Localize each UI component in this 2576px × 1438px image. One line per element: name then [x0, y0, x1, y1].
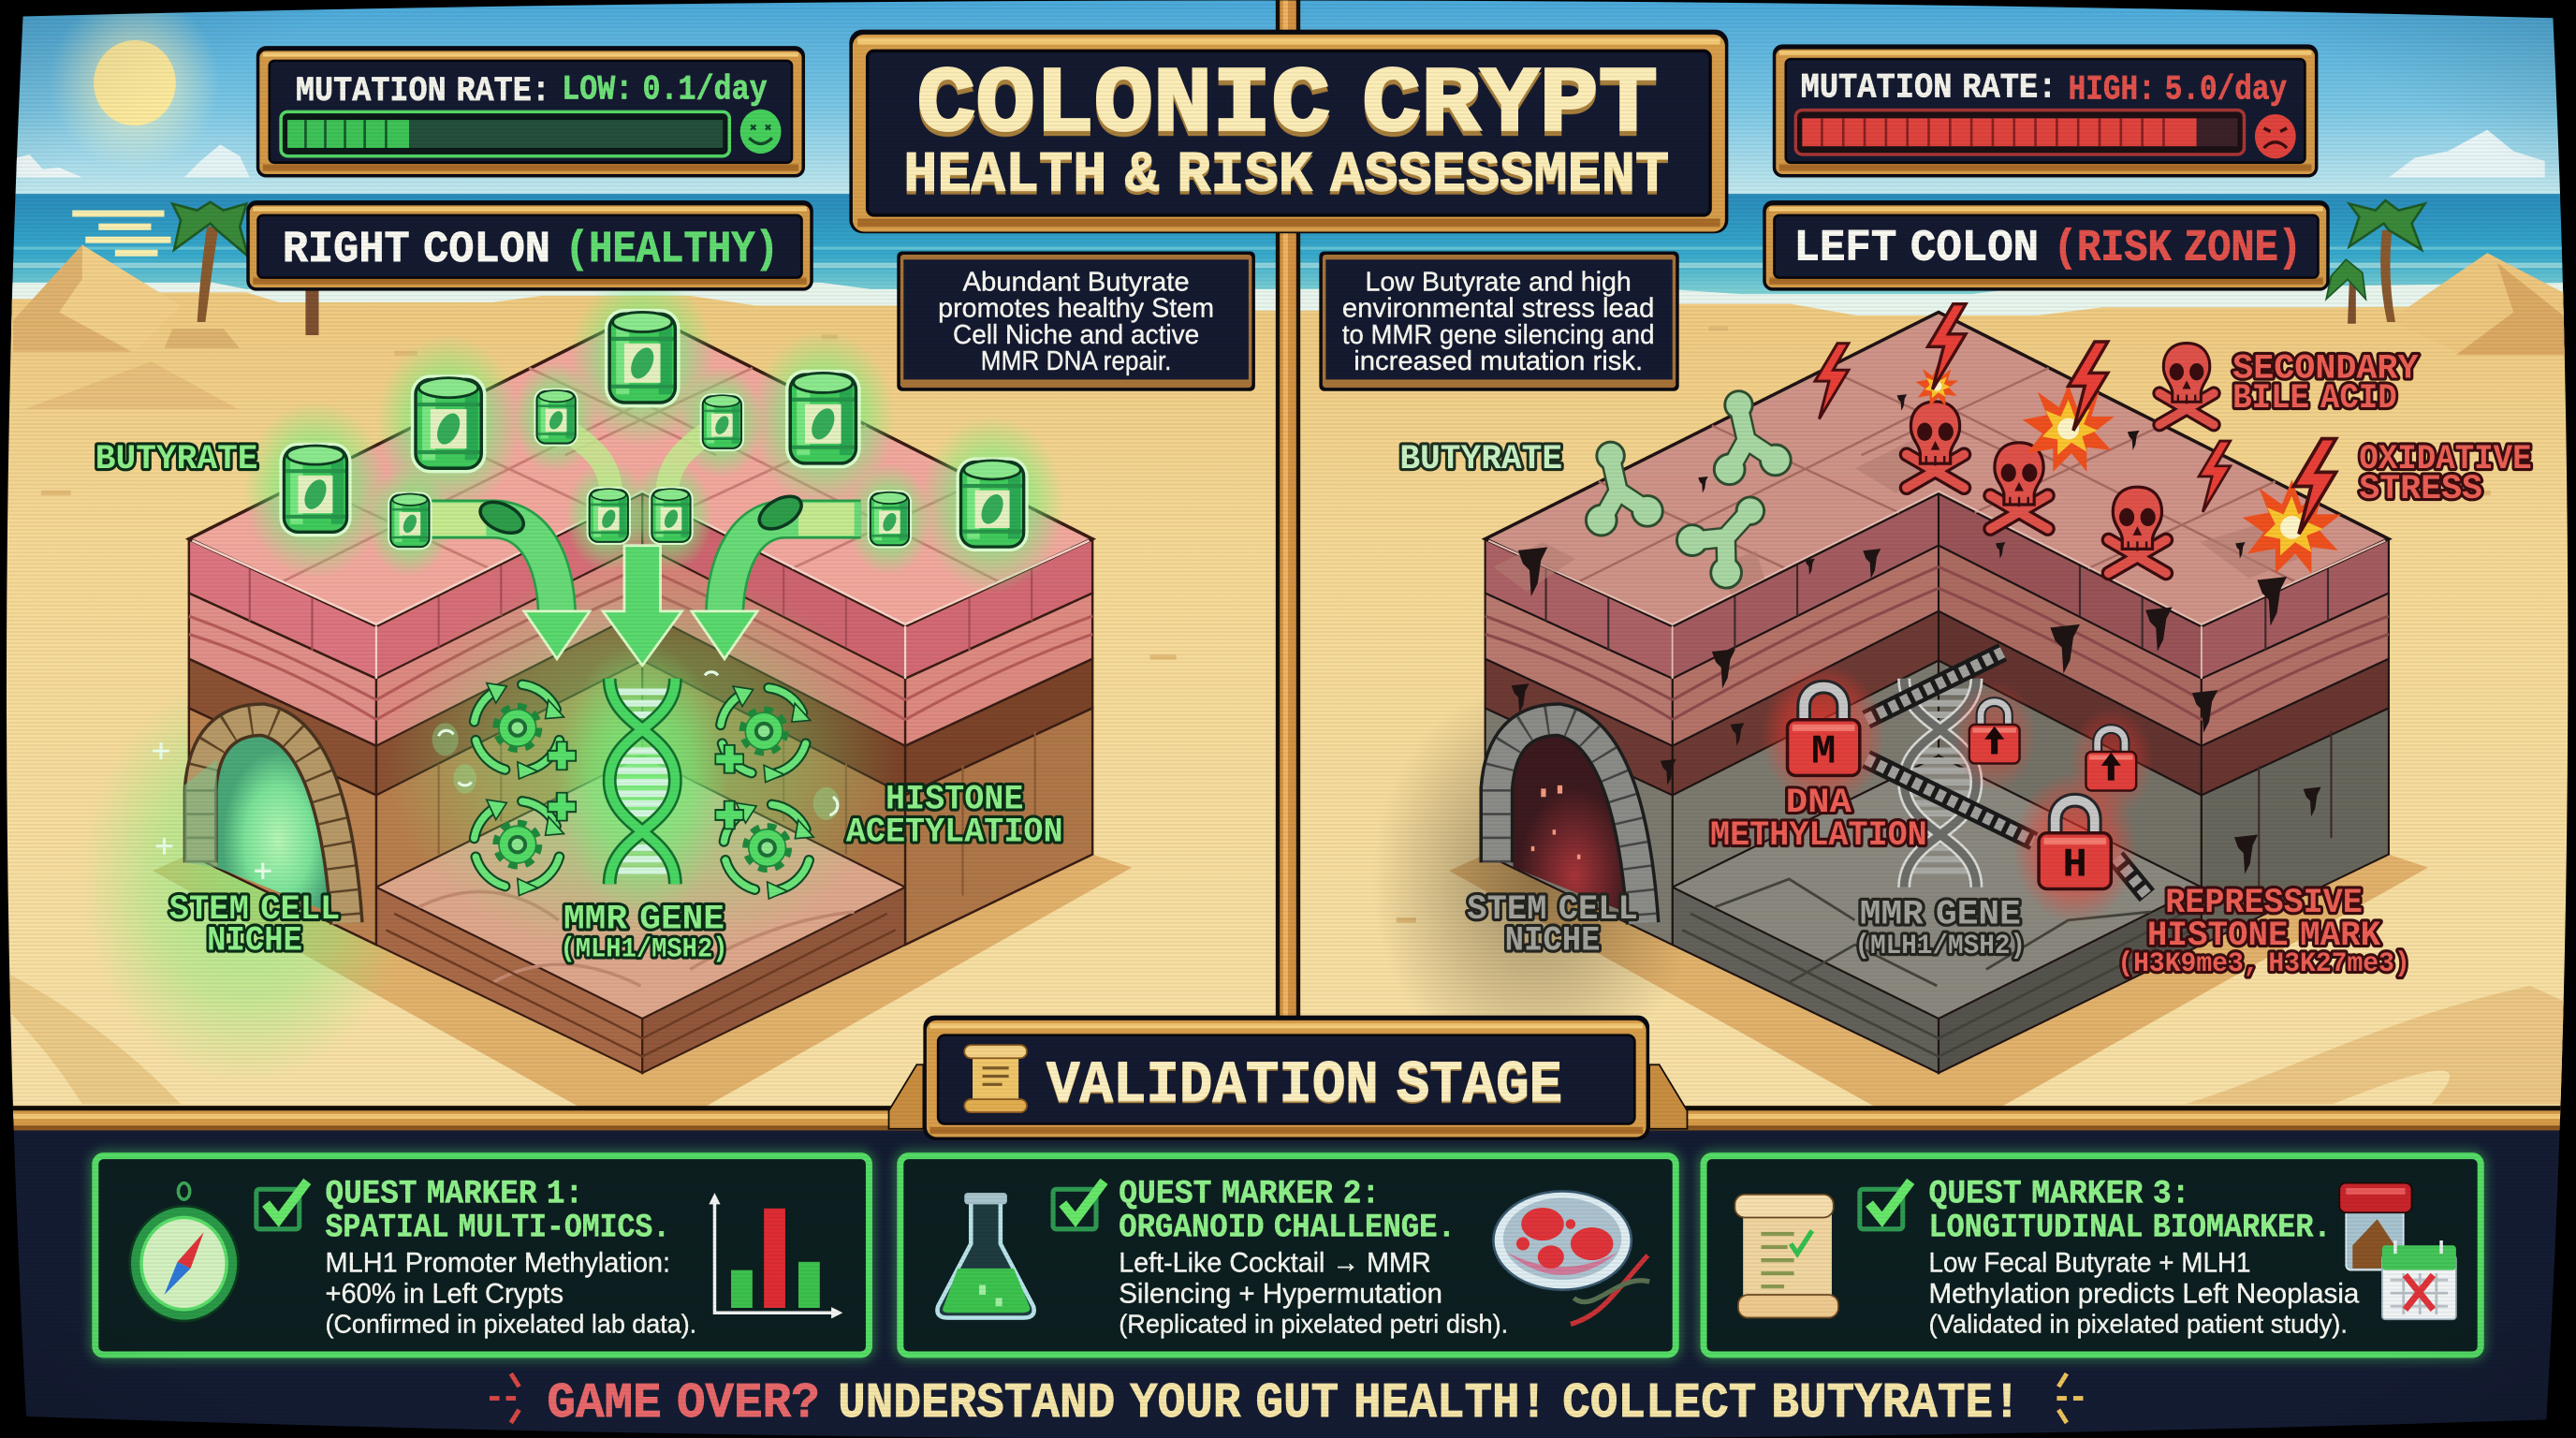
panel: quest marker 2 [900, 1156, 1676, 1355]
quest 1 text: +60% in Left Crypts [326, 1279, 564, 1310]
background: beach scene [0, 0, 2576, 1117]
panel: validation stage: VALIDATION STAGE [1046, 1051, 1562, 1119]
quest 1 text: MLH1 Promoter Methylation: [326, 1247, 670, 1278]
quest 3 text: Methylation predicts Left Neoplasia [1928, 1279, 2360, 1310]
icon: compass [130, 1183, 238, 1321]
labels: left colon: BILE ACID [2232, 379, 2397, 418]
icon: right palm trees [2326, 200, 2425, 324]
labels: right colon [95, 440, 1063, 964]
cracks [1512, 394, 2321, 874]
text box: risk summary: environmental stress lead [1342, 294, 1654, 324]
panel: quest marker 3 [1704, 1156, 2481, 1355]
labels: right colon: MMR GENE [564, 901, 724, 940]
quest 1 text: QUEST MARKER 1: [326, 1176, 583, 1213]
icon: butyrate barrels [279, 309, 1029, 551]
icon: parchment scroll [1734, 1195, 1838, 1318]
labels: left colon: REPRESSIVE [2165, 884, 2363, 923]
labels: left colon: BUTYRATE [1399, 440, 1562, 479]
icon: silenced MMR gene DNA [1904, 679, 1976, 888]
title text: HEALTH & RISK ASSESSMENT [903, 144, 1669, 209]
title plaque [849, 30, 1728, 233]
quest 2 text: ORGANOID CHALLENGE. [1119, 1210, 1456, 1247]
panel: mutation rate low: MUTATION RATE: [296, 72, 550, 111]
labels: right colon: NICHE [207, 921, 302, 961]
quest 3 text: QUEST MARKER 3: [1928, 1176, 2190, 1213]
quest 1 text [326, 1176, 696, 1338]
labels: right colon: BUTYRATE [95, 440, 258, 479]
panel: mutation rate high: MUTATION RATE: [1801, 69, 2056, 109]
quest 2 text: Silencing + Hypermutation [1119, 1279, 1442, 1310]
footer call to action: UNDERSTAND YOUR GUT HEALTH! COLLECT BUTYRATE! [838, 1375, 2021, 1431]
text box: risk summary: increased mutation risk. [1354, 346, 1643, 376]
labels: left colon: (MLH1/MSH2) [1855, 930, 2026, 961]
labels: left colon: (H3K9me3, H3K27me3) [2117, 947, 2410, 979]
panel: validation stage [923, 1016, 1649, 1140]
progress bar low [281, 111, 729, 156]
panel: quest marker 1 [95, 1156, 869, 1355]
arrows: butyrate flow [431, 431, 861, 666]
labels: left colon: METHYLATION [1710, 816, 1927, 856]
icon: sad face [2255, 114, 2296, 158]
quest 3 text [1928, 1176, 2360, 1338]
icon: check 2 [1053, 1181, 1104, 1229]
panel: right colon healthy block [82, 312, 1132, 1142]
icon: methylation and histone locks [1788, 687, 2136, 888]
sparkle right [2056, 1373, 2083, 1423]
text box: healthy summary [897, 252, 1255, 391]
pink top surface [189, 312, 1092, 626]
quest 2 text: QUEST MARKER 2: [1119, 1176, 1380, 1213]
heading: left colon: LEFT COLON [1794, 224, 2039, 273]
icon: flask [937, 1193, 1034, 1318]
icon: smiley [740, 110, 782, 154]
icon: petri dish [1493, 1191, 1649, 1325]
icon: methylation and histone locks: H [2063, 842, 2087, 888]
quest 3 text: Low Fecal Butyrate + MLH1 [1928, 1247, 2250, 1278]
quest 1 text: (Confirmed in pixelated lab data). [326, 1309, 696, 1338]
text box: risk summary [1319, 252, 1679, 391]
icon: scroll [964, 1045, 1027, 1112]
heading: left colon: (RISK ZONE) [2054, 224, 2302, 273]
labels: right colon: HISTONE [886, 780, 1023, 819]
quest 2 text: Left-Like Cocktail → MMR [1119, 1247, 1431, 1278]
sparkle left [490, 1373, 520, 1423]
labels: right colon: (MLH1/MSH2) [560, 932, 728, 964]
icon: check 1 [256, 1181, 307, 1229]
heading: left colon [1763, 200, 2330, 291]
labels: left colon: HISTONE MARK [2147, 917, 2381, 956]
labels: left colon: MMR GENE [1860, 895, 2021, 934]
icon: degraded butyrate molecules [1586, 391, 1792, 599]
quest 3 text: (Validated in pixelated patient study). [1928, 1309, 2348, 1338]
title text: COLONIC CRYPT [916, 53, 1658, 158]
panel: mutation rate low [256, 46, 805, 178]
bar chart [709, 1193, 842, 1318]
quest 2 text [1119, 1176, 1508, 1338]
icon: calendar [2382, 1240, 2456, 1319]
panel: mutation rate low: LOW: 0.1/day [562, 70, 768, 110]
quest 2 text: (Replicated in pixelated petri dish). [1119, 1309, 1508, 1338]
labels: left colon: OXIDATIVE [2359, 440, 2532, 479]
text box: healthy summary: MMR DNA repair. [981, 346, 1171, 376]
stem cell glow [94, 704, 386, 1069]
panel: mutation rate high: HIGH: 5.0/day [2069, 70, 2287, 110]
icon: methylation and histone locks: M [1811, 728, 1836, 775]
crypt floor and inner walls [376, 493, 905, 1073]
labels: right colon: STEM CELL [169, 890, 340, 930]
interior glow [402, 584, 883, 941]
icon: MMR gene DNA healthy [609, 679, 675, 884]
heading: right colon [246, 200, 813, 291]
panel: left colon risk block [1372, 312, 2428, 1142]
icon: stem cell niche arch [153, 720, 346, 923]
heading: right colon: (HEALTHY) [565, 226, 779, 275]
text box: healthy summary: Cell Niche and active [953, 320, 1199, 350]
icon: check 3 [1860, 1181, 1910, 1229]
text box: risk summary: Low Butyrate and high [1365, 268, 1632, 298]
footer call to action: GAME OVER? [547, 1375, 820, 1431]
icon: sample jar [2339, 1183, 2411, 1270]
labels: left colon: NICHE [1505, 921, 1600, 961]
labels: left colon: STEM CELL [1467, 890, 1638, 930]
bottom dashboard [0, 1064, 2576, 1438]
icon: skulls [1907, 344, 2214, 573]
text box: healthy summary: promotes healthy Stem [938, 294, 1214, 324]
labels: left colon: DNA [1786, 784, 1852, 823]
labels: left colon: SECONDARY [2232, 350, 2419, 389]
labels: left colon: STRESS [2359, 470, 2482, 509]
lock glows [1761, 664, 2154, 923]
progress bar high [1795, 110, 2244, 154]
center divider beam [1276, 0, 1300, 1027]
title text [903, 53, 1669, 209]
icon: chains [1866, 653, 2147, 895]
icon: active repair gears [432, 672, 840, 899]
heading: right colon: RIGHT COLON [283, 226, 550, 275]
quest 3 text: LONGITUDINAL BIOMARKER. [1928, 1210, 2331, 1247]
outer walls [189, 539, 1092, 945]
icon: explosions and lightning [1815, 304, 2341, 574]
icon: stem cell niche arch damaged [1497, 720, 1643, 923]
labels: left colon [1399, 350, 2532, 979]
text box: healthy summary: Abundant Butyrate [962, 268, 1190, 298]
labels: right colon: ACETYLATION [846, 814, 1063, 853]
quest 1 text: SPATIAL MULTI-OMICS. [326, 1210, 670, 1247]
icon: left palm trees [165, 202, 318, 348]
text box: risk summary: to MMR gene silencing and [1342, 320, 1654, 350]
panel: mutation rate high [1773, 44, 2318, 178]
glow behind barrels [243, 270, 1064, 594]
